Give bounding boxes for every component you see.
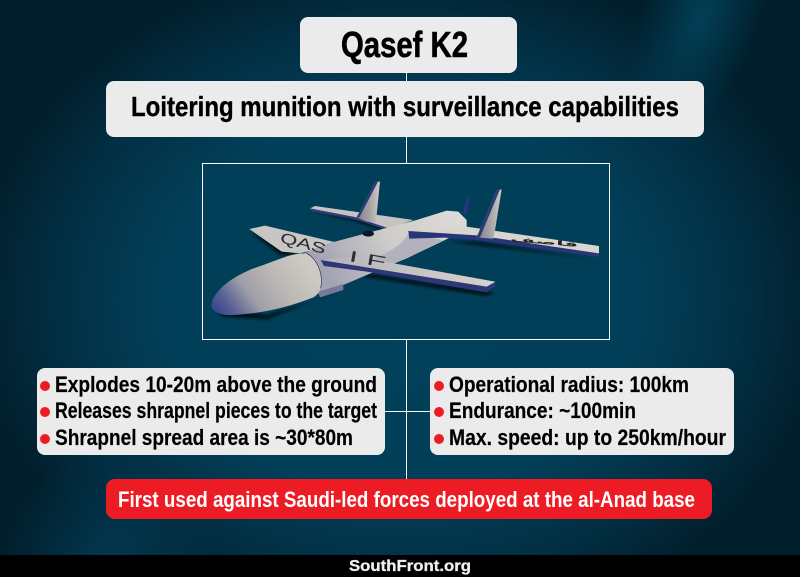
bullet <box>40 434 50 444</box>
callout: first use: First used against Saudi-led forces deployed at the al-Anad base <box>118 487 695 512</box>
front near wing <box>321 257 495 288</box>
nose <box>211 254 322 315</box>
fact text: Max. speed: up to 250km/hour <box>449 425 726 450</box>
pylon <box>318 284 343 297</box>
antenna <box>463 197 470 215</box>
front far wing <box>249 226 340 253</box>
panel: drone image frame <box>202 164 610 340</box>
callout: first use <box>106 479 712 519</box>
fuselage <box>300 211 467 297</box>
footer bar <box>0 555 800 577</box>
subtitle: Loitering munition with surveillance capabilities <box>131 91 679 122</box>
wing script: قاصف <box>510 235 579 249</box>
fact text: Shrapnel spread area is ~30*80m <box>55 425 353 450</box>
wing lettering: QAS <box>278 230 328 258</box>
fact text: Explodes 10-20m above the ground <box>55 372 377 397</box>
icon: drone illustration: I F <box>348 248 387 271</box>
panel: warhead facts <box>37 368 385 455</box>
title: Qasef K2 <box>341 24 468 65</box>
bullet <box>434 434 444 444</box>
bullet <box>40 381 50 391</box>
fact text: Operational radius: 100km <box>449 372 689 397</box>
icon: drone illustration <box>211 182 599 319</box>
fact text: Releases shrapnel pieces to the target <box>55 398 378 423</box>
connector lines <box>385 73 430 479</box>
bullet <box>434 381 444 391</box>
fact text: Endurance: ~100min <box>449 398 636 423</box>
dome <box>363 231 374 237</box>
subtitle box <box>106 81 704 137</box>
rear far wing <box>310 206 413 229</box>
rear near wing <box>408 227 599 254</box>
title box <box>300 17 517 73</box>
panel: performance facts <box>430 368 734 455</box>
bullet <box>434 407 444 417</box>
bullet <box>40 407 50 417</box>
fin near <box>477 189 502 239</box>
fin far <box>357 182 380 223</box>
footer text: SouthFront.org <box>349 558 471 575</box>
